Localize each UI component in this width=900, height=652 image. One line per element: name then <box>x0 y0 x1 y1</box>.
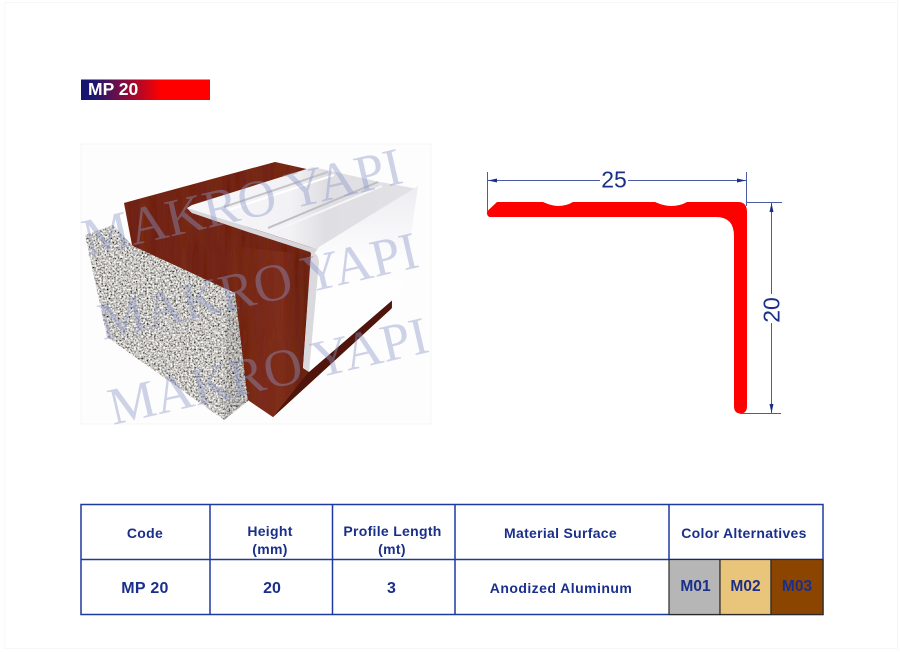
width dimension: 25: 25 <box>601 166 627 192</box>
width dimension: 25 <box>488 166 746 212</box>
table data row: Anodized Aluminum <box>490 580 632 596</box>
table header row: Profile Length <box>343 523 442 539</box>
color swatches <box>669 560 823 614</box>
table data row: 20 <box>263 580 281 597</box>
profile cross-section drawing <box>487 166 784 414</box>
wood block <box>124 162 392 417</box>
table header row: (mt) <box>378 541 406 557</box>
red L profile <box>487 202 747 414</box>
watermark: MAKRO YAPI <box>77 138 434 437</box>
height dimension: 20: 20 <box>758 297 784 323</box>
table header row: (mm) <box>252 541 288 557</box>
color swatches: M02 <box>730 578 761 595</box>
title bar <box>81 79 210 100</box>
watermark: MAKRO YAPI: MAKRO YAPI <box>93 222 424 352</box>
table header row: Color Alternatives <box>681 525 807 541</box>
watermark: MAKRO YAPI: MAKRO YAPI <box>77 138 408 268</box>
specification table <box>81 504 823 614</box>
table header row: Material Surface <box>504 525 617 541</box>
color swatches: M03 <box>782 578 812 595</box>
table header row: Code <box>127 525 163 541</box>
height dimension: 20 <box>740 202 784 414</box>
table data row: MP 20 <box>121 580 169 597</box>
table data row: 3 <box>387 580 396 597</box>
watermark: MAKRO YAPI: MAKRO YAPI <box>103 307 434 437</box>
table data row <box>121 580 632 597</box>
product illustration panel <box>77 138 434 437</box>
title bar: MP 20 <box>88 79 139 99</box>
concrete block <box>85 225 248 420</box>
table header row: Height <box>247 523 293 539</box>
table header row <box>127 523 807 557</box>
white aluminium profile <box>187 167 418 372</box>
color swatches: M01 <box>680 578 711 595</box>
